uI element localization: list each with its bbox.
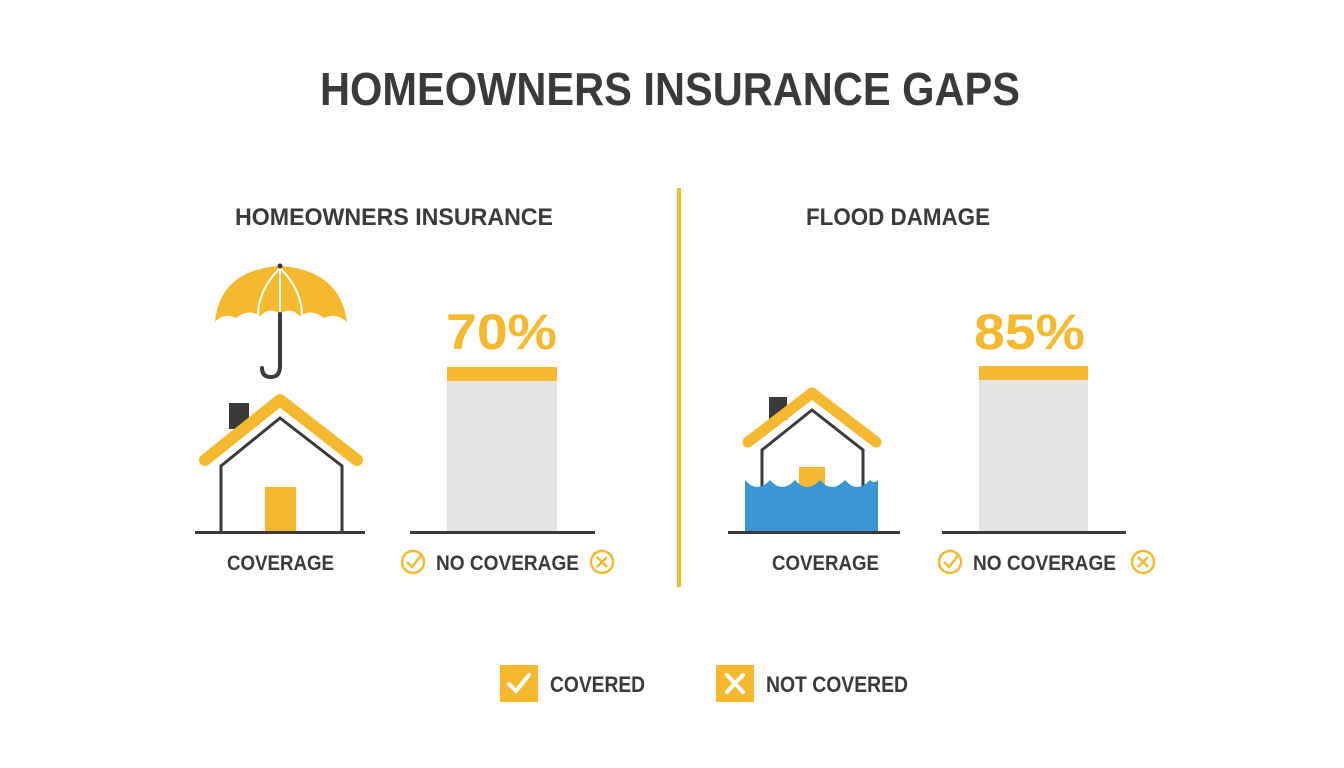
label: no coverage: NO COVERAGE (436, 552, 579, 575)
title: HOMEOWNERS INSURANCE GAPS (320, 63, 1020, 115)
label: coverage: COVERAGE (772, 552, 879, 575)
divider (677, 188, 681, 587)
icon: house (195, 400, 365, 534)
heading: homeowners insurance: HOMEOWNERS INSURANCE (235, 204, 553, 231)
bar chart: 85%: 85% (974, 304, 1085, 360)
legend: covered (500, 665, 645, 702)
legend: not covered (716, 665, 908, 702)
bar chart: 70% (410, 304, 595, 534)
panel: flood damage (728, 204, 1154, 575)
heading: flood damage: FLOOD DAMAGE (806, 204, 990, 231)
label: no coverage: NO COVERAGE (973, 552, 1116, 575)
label: coverage: COVERAGE (227, 552, 334, 575)
legend: not covered: NOT COVERED (766, 672, 908, 697)
legend (500, 665, 908, 702)
panel: homeowners insurance (195, 204, 613, 575)
bar chart: 70%: 70% (446, 304, 557, 360)
bar chart: 85% (942, 304, 1126, 534)
icon: umbrella (215, 264, 347, 377)
icon: flooded house (728, 393, 900, 534)
legend: covered: COVERED (550, 672, 645, 697)
